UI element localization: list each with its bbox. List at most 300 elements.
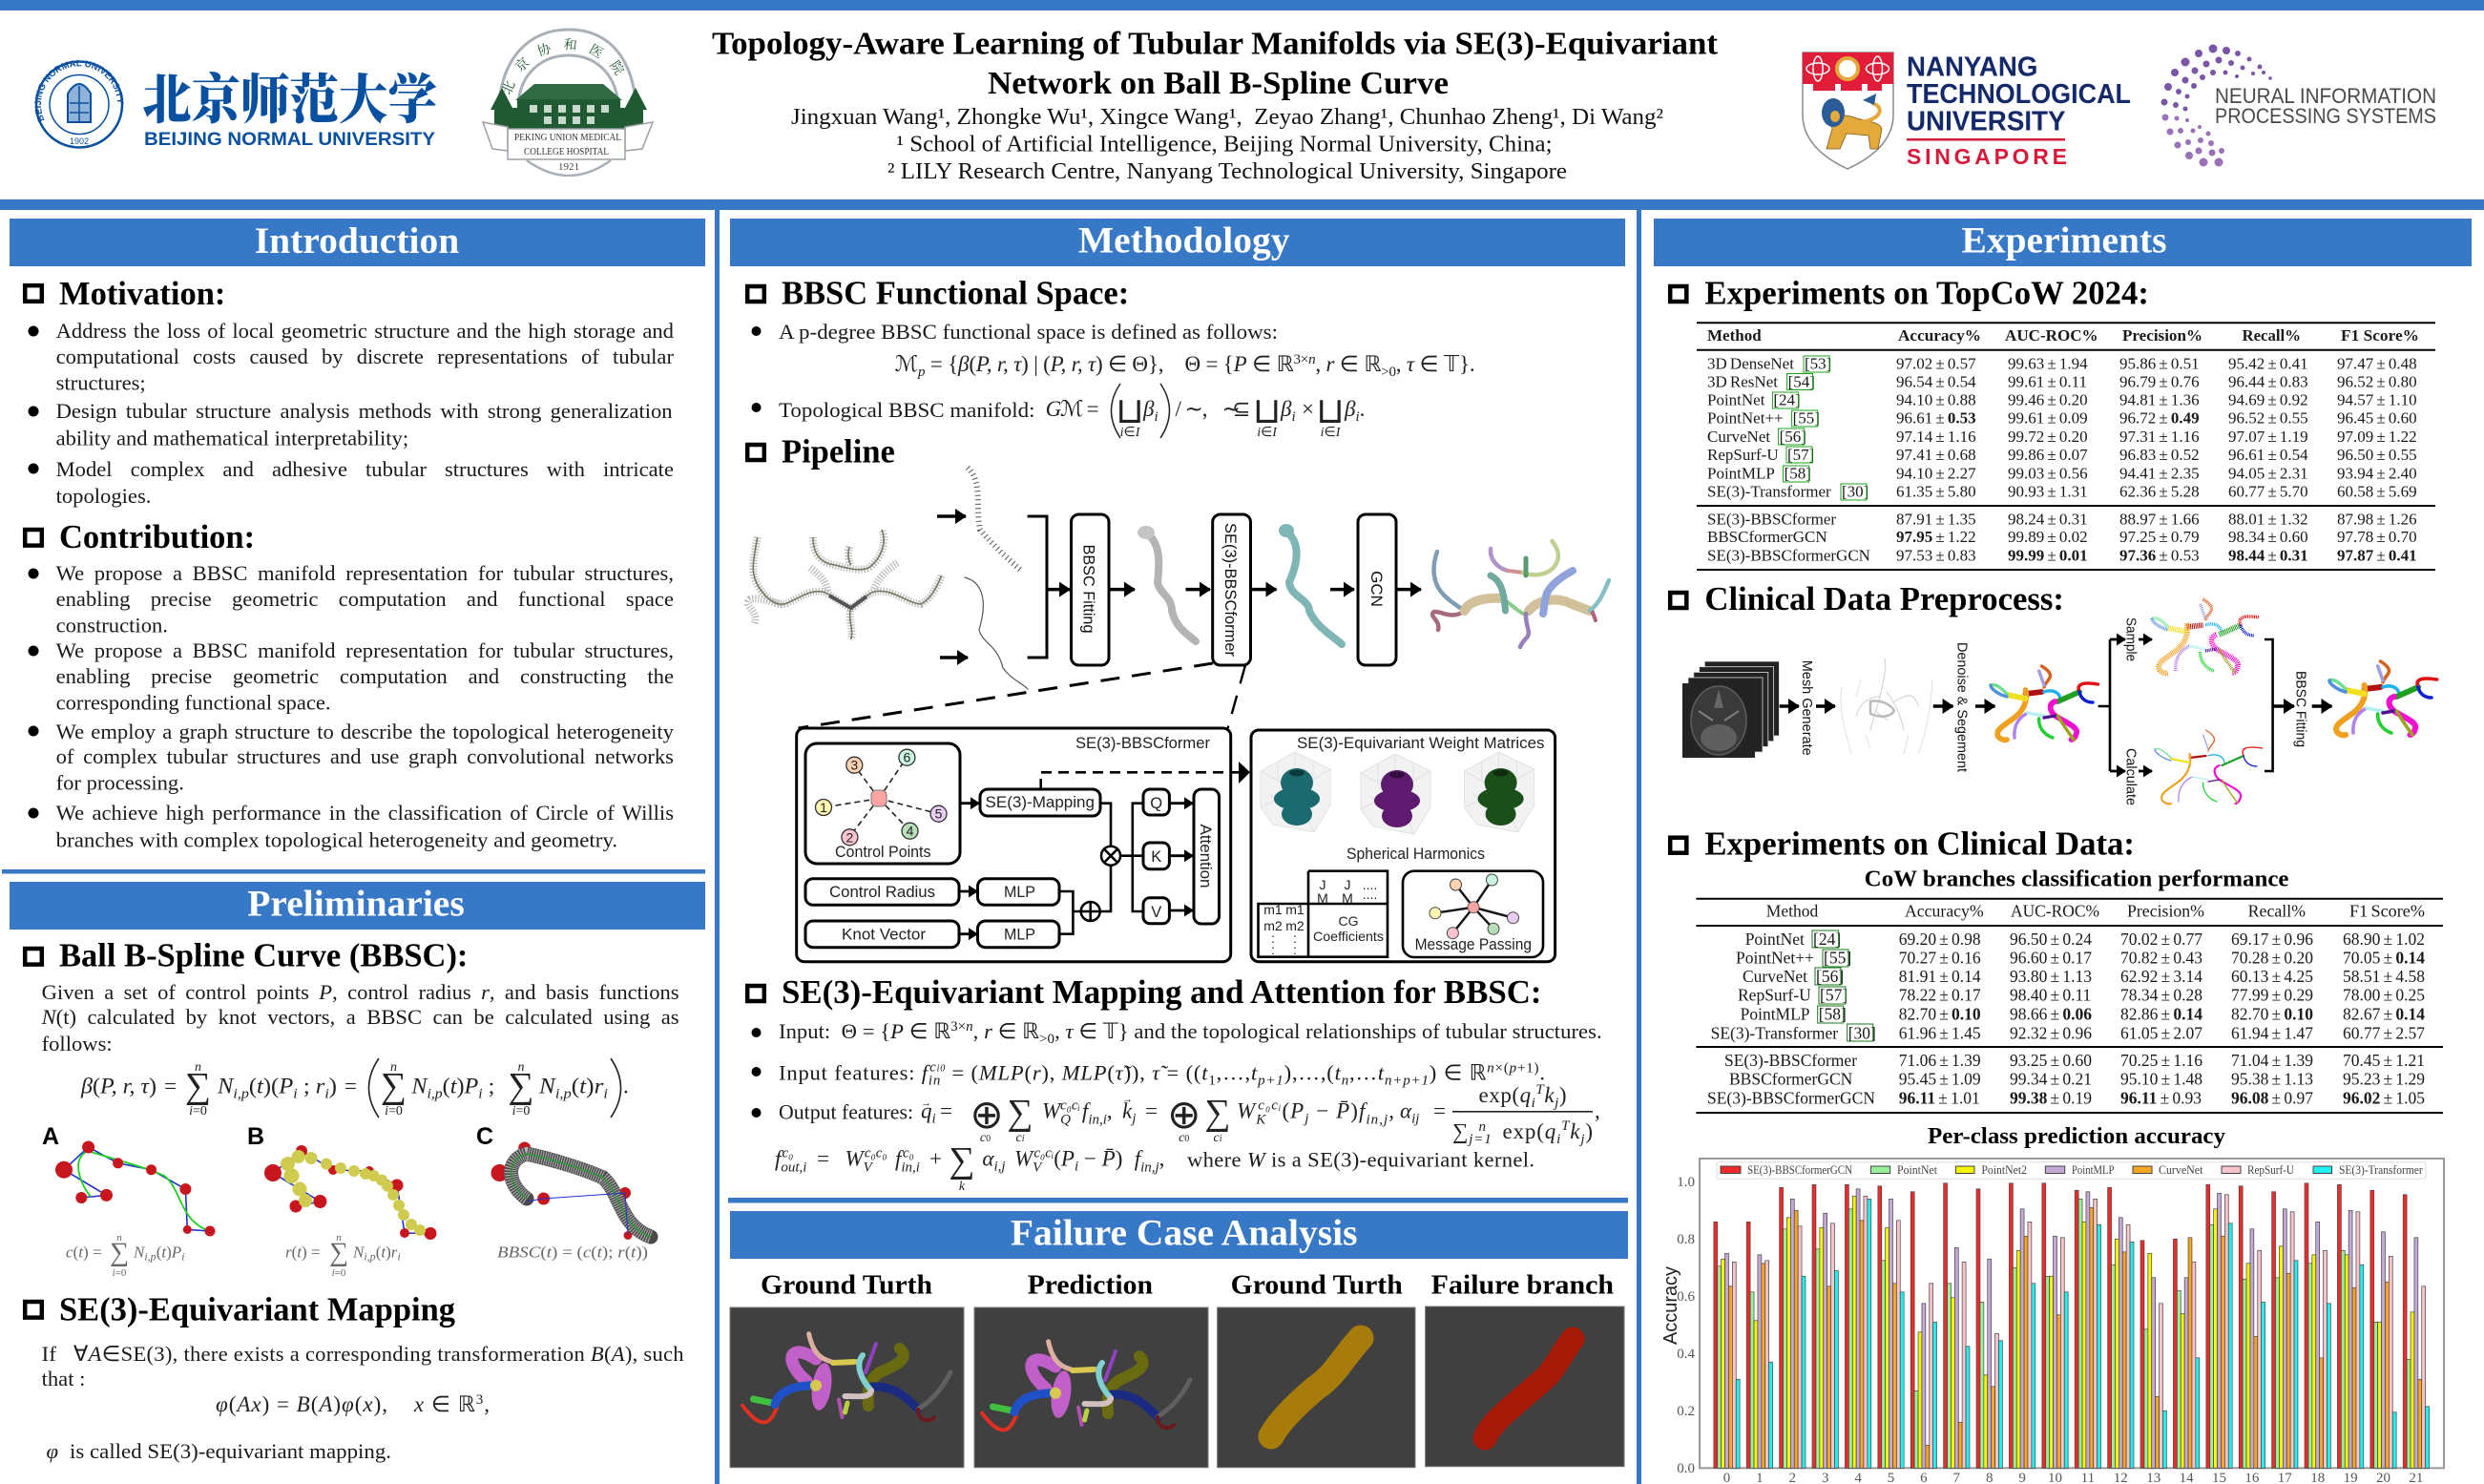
bullet: output features: exp( [1496, 1119, 1544, 1143]
table: TopCoW 2024 results: [57] [1787, 446, 1814, 464]
text: topological BBSC manifold: × [1302, 397, 1314, 421]
bullet: input features: n [1342, 1074, 1348, 1089]
bullet: input: τ ∈ 𝕋} and the topological relationships of tubular structures. [1065, 1019, 1602, 1043]
formula: BBSC: ∑ [185, 1066, 211, 1106]
table: clinical results: 98.66 ± 0.06 [2010, 1004, 2092, 1023]
table: clinical results: 82.70 ± 0.10 [2231, 1004, 2313, 1023]
text: functional space definition: >0 [1381, 365, 1396, 380]
Q K V boxes: V [1151, 904, 1161, 921]
table: clinical results: 96.50 ± 0.24 [2010, 930, 2092, 949]
text: motivation bullets: structures; [56, 370, 146, 395]
figure B: radius balls: B [247, 1123, 264, 1150]
panel: preliminaries [10, 882, 705, 1463]
table: clinical results: 70.05 ± 0.14 [2343, 949, 2425, 968]
formula: output feature update: ∑ [949, 1140, 975, 1181]
table: clinical results: 68.90 ± 1.02 [2343, 930, 2425, 949]
legend: RepSurf-U [2247, 1162, 2295, 1177]
formula: BBSC: ; [483, 1075, 494, 1097]
table: TopCoW 2024 results: SE(3)-Transformer [1707, 483, 1831, 501]
table: clinical results: 95.38 ± 1.13 [2231, 1070, 2313, 1089]
column divider right [1637, 210, 1641, 1484]
table: TopCoW 2024 results: 96.50 ± 0.55 [2337, 446, 2417, 464]
legend: PointMLP [2072, 1162, 2115, 1177]
knot vector row: MLP [1004, 926, 1035, 943]
table: TopCoW 2024 results: 3D ResNet [1707, 372, 1778, 390]
table: clinical results: 96.11 ± 1.01 [1899, 1088, 1980, 1107]
table: clinical results: 78.00 ± 0.25 [2343, 986, 2425, 1005]
formula: BBSC: = [344, 1075, 357, 1097]
CG coefficients table: CG [1338, 913, 1359, 929]
bullet: output features: in,j [1366, 1113, 1388, 1128]
table: clinical results: 61.94 ± 1.47 [2231, 1023, 2313, 1042]
table: clinical results: PointNet++ [1736, 949, 1814, 968]
header: Failure Case Analysis: Failure Case Analysis [1011, 1212, 1357, 1254]
text: equivariance definition: 3 [476, 1392, 483, 1408]
x axis labels [1723, 1471, 2423, 1484]
formula: output feature update: c₀ [782, 1146, 793, 1161]
subheading: Motivation: Motivation: [59, 276, 225, 312]
section divider [2, 869, 705, 874]
logo: Peking Union Medical College Hospital: 北京协和医院 [502, 38, 624, 94]
text: BBSC definition: N(t) calculated by knot vectors, a BBSC can be calculated using as [42, 1005, 679, 1029]
formula: BBSC: t)(P [257, 1075, 292, 1097]
formula: BBSC: t)P [450, 1075, 478, 1097]
CG coefficients table: M [1342, 890, 1353, 906]
text: BBSC definition: Given a set of control points P, control radius r, and basis functions [42, 980, 679, 1004]
table: clinical results: 61.96 ± 1.45 [1899, 1023, 1981, 1042]
table: clinical results: 61.05 ± 2.07 [2120, 1023, 2202, 1042]
header: Experiments [1654, 219, 2472, 266]
arrows [1780, 639, 2332, 771]
table: clinical results: PointMLP [1741, 1004, 1810, 1023]
subheading: Contribution: Contribution: [59, 519, 255, 555]
CG coefficients table: m1 [1285, 902, 1305, 917]
formula: output feature update: c₀ [903, 1146, 914, 1161]
formula: BBSC: n [195, 1060, 201, 1075]
table: clinical results: 77.99 ± 0.29 [2231, 986, 2313, 1005]
legend: CurveNet [2159, 1162, 2203, 1177]
bullet: output features: Output features: [779, 1100, 913, 1124]
formula: output feature update: − [1078, 1147, 1102, 1171]
text: motivation bullets: Address the loss of local geometric structure and the high storage and [56, 319, 674, 343]
logo: Beijing Normal University: 1902 [70, 136, 89, 146]
table: TopCoW 2024 results: 95.42 ± 0.41 [2228, 355, 2308, 373]
bullet: input features: n×(p+1) [1487, 1061, 1539, 1076]
table: TopCoW 2024 results: PointNet [1707, 391, 1765, 409]
table: TopCoW 2024 results: 96.83 ± 0.52 [2119, 446, 2200, 464]
table: TopCoW 2024 results: BBSCformerGCN [1707, 528, 1827, 546]
table: TopCoW 2024 results: [30] [1842, 483, 1868, 501]
table: TopCoW 2024 results: 97.53 ± 0.83 [1896, 547, 1976, 565]
bullet: output features: j=1 [1467, 1132, 1492, 1147]
header: Methodology: Methodology [1078, 219, 1290, 261]
bullet: output features: n [1479, 1119, 1486, 1135]
figure B: radius balls: n [336, 1232, 342, 1244]
dashed arrow to weight matrices [1041, 762, 1250, 789]
table: clinical results: 82.86 ± 0.14 [2120, 1004, 2202, 1023]
text: functional space definition: , [1396, 352, 1407, 376]
formula: output feature update: f [1135, 1147, 1144, 1171]
text: BBSC definition [42, 979, 679, 1056]
subheading: Experiments on Clinical Data: Experiments on Clinical Data: [1704, 826, 2135, 863]
figure A: control polygon and centre curve [42, 1123, 216, 1279]
bullet: input: r ∈ ℝ [984, 1019, 1039, 1043]
table: TopCoW 2024 results: SE(3)-BBSCformer [1707, 510, 1836, 528]
title: Topology-Aware Learning of Tubular Manifolds via SE(3)-Equivariant [712, 27, 1719, 62]
text: functional space definition: β(P, r, τ) | (P, r, τ) ∈ Θ}, Θ = {P ∈ ℝ [958, 352, 1294, 376]
control radius row: MLP [1004, 884, 1035, 901]
table: TopCoW 2024 results: 94.57 ± 1.10 [2337, 391, 2417, 409]
bullet: output features: ⊕ [1167, 1094, 1200, 1138]
table: clinical results: 98.40 ± 0.11 [2010, 986, 2091, 1005]
formula: output feature update: W [1014, 1147, 1034, 1171]
subheading: SE(3)-Equivariant Mapping and Attention: SE(3)-Equivariant Mapping and Attention for BBSC: [782, 974, 1542, 1011]
text: topological BBSC manifold: i [1154, 409, 1159, 425]
header: Methodology [730, 219, 1625, 266]
formula: output feature update: c₀c₀ [865, 1146, 887, 1161]
table: TopCoW 2024 results: 99.61 ± 0.09 [2008, 409, 2088, 428]
authors and affiliations: ² LILY Research Centre, Nanyang Technological University, Singapore [887, 159, 1567, 184]
CG coefficients table: m2 [1263, 918, 1283, 933]
figure A: control polygon and centre curve: i,p [144, 1250, 157, 1264]
table: TopCoW 2024 results: 96.52 ± 0.80 [2337, 372, 2417, 390]
table: clinical results: 92.32 ± 0.96 [2010, 1023, 2092, 1042]
y axis: 0.0 [1677, 1461, 1695, 1476]
formula: output feature update: α [982, 1147, 994, 1171]
coloured vessel result [1432, 541, 1609, 647]
subheading: SE(3)-Equivariant Mapping: SE(3)-Equivariant Mapping [59, 1292, 455, 1328]
attention box [1194, 789, 1220, 924]
text: topological BBSC manifold: Gℳ = [1046, 397, 1099, 421]
rotated step labels: Mesh Generate [1799, 660, 1815, 756]
bullet: output features: i [931, 1112, 936, 1127]
figure A: control polygon and centre curve: ∑ [110, 1238, 129, 1267]
image: failure branch: Failure branch [1431, 1269, 1614, 1300]
bullet: output features: T [1535, 1082, 1545, 1097]
text: contribution bullets: We propose a BBSC manifold representation for tubular structures, [56, 638, 674, 662]
table: clinical results: [55] [1824, 949, 1851, 968]
table: TopCoW 2024 results: 88.01 ± 1.32 [2228, 510, 2308, 528]
bullet: output features: → [1122, 1094, 1133, 1105]
table: TopCoW 2024 results: 94.05 ± 2.31 [2228, 465, 2308, 483]
table: TopCoW 2024 results: 99.63 ± 1.94 [2008, 355, 2088, 373]
figure A: control polygon and centre curve: A [42, 1123, 59, 1150]
image: predicted vessels: Prediction [1028, 1269, 1153, 1300]
CG coefficients table [1258, 871, 1388, 957]
table: TopCoW 2024 results: 97.95 ± 1.22 [1896, 528, 1976, 546]
logo: Peking Union Medical College Hospital: 1921 [558, 161, 579, 173]
title [712, 27, 1719, 101]
legend: SE(3)-Transformer [2339, 1162, 2423, 1177]
formula: output feature update: + [929, 1147, 942, 1171]
control points graph: 6 [904, 750, 911, 765]
subheading: Pipeline: Pipeline [782, 433, 895, 470]
formula: output feature update: i [1075, 1160, 1078, 1175]
figure B: radius balls [247, 1123, 437, 1279]
bullet: output features: c₀cᵢ [1060, 1098, 1080, 1114]
text: topological BBSC manifold: / ∼, [1176, 397, 1208, 421]
table: clinical results: 70.82 ± 0.43 [2120, 949, 2202, 968]
figure B: radius balls: t)r [381, 1244, 397, 1262]
text: motivation bullets: ability and mathematical interpretability; [56, 426, 408, 450]
y axis [1660, 1175, 1695, 1476]
formula: output feature update: P [1060, 1147, 1075, 1171]
header [34, 27, 2436, 184]
text: topological BBSC manifold: ⊔ [1116, 391, 1144, 431]
rotated step labels: Sample [2122, 617, 2140, 661]
y axis: 0.8 [1677, 1232, 1695, 1247]
box: BBSC Fitting: BBSC Fitting [1080, 544, 1097, 634]
image: failure branch [1426, 1269, 1624, 1467]
bullet: input: , [1054, 1019, 1065, 1043]
SE(3)-Mapping box: SE(3)-Mapping [985, 794, 1095, 811]
table: TopCoW 2024 results: 96.61 ± 0.53 [1896, 409, 1976, 428]
formula: output feature update: where W is a SE(3)-equivariant kernel. [1187, 1148, 1534, 1172]
bullet: output features: ∑ [1452, 1119, 1468, 1143]
flow arrows [959, 804, 1193, 934]
formula: BBSC: . [623, 1075, 629, 1097]
formula: BBSC: i=0 [512, 1104, 530, 1118]
y axis: 0.4 [1677, 1347, 1695, 1362]
box: GCN: GCN [1367, 571, 1386, 607]
table: clinical results: AUC-ROC% [2011, 902, 2099, 921]
segmented vessels [1991, 666, 2098, 740]
text: equivariance definition: φ [46, 1439, 58, 1463]
table: clinical results: SE(3)-BBSCformer [1724, 1051, 1857, 1070]
control points graph [805, 743, 960, 864]
table title: CoW branches: CoW branches classification performance [1865, 867, 2289, 891]
figure A: control polygon and centre curve: t)P [161, 1244, 181, 1262]
text: motivation bullets: computational costs caused by discrete representations of tubular [56, 345, 674, 368]
bullet: input features [752, 1060, 1545, 1089]
multiply and add nodes [1081, 847, 1120, 921]
text: contribution bullets: for processing. [56, 770, 184, 794]
formula: BBSC: ) [329, 1075, 337, 1097]
text: contribution bullets [29, 560, 674, 851]
table: clinical results: 71.06 ± 1.39 [1899, 1051, 1981, 1070]
control radius row: Control Radius [829, 884, 935, 901]
bullet: input features: ) ∈ ℝ [1430, 1061, 1487, 1085]
panel: SE(3)-equivariant weight matrices [1251, 730, 1555, 962]
panel: SE(3)-BBSCformer architecture: SE(3)-BBSCformer [1075, 735, 1211, 752]
bullet: input features: n+p+1 [1385, 1074, 1429, 1089]
formula: BBSC: N [538, 1075, 557, 1097]
legend: PointNet [1897, 1162, 1937, 1177]
panel: SE(3)-equivariant weight matrices: SE(3)-Equivariant Weight Matrices [1297, 735, 1544, 752]
table: clinical results: 71.04 ± 1.39 [2231, 1051, 2313, 1070]
table: clinical results: 60.13 ± 4.25 [2231, 967, 2313, 986]
rotated step labels: BBSC Fitting [2292, 671, 2309, 747]
CG coefficients table: : [1293, 942, 1297, 957]
table: clinical results: 82.67 ± 0.14 [2343, 1004, 2425, 1023]
table: clinical results: 99.38 ± 0.19 [2010, 1088, 2092, 1107]
text: topological BBSC manifold: . [1360, 397, 1365, 421]
subheading: Ball B-Spline Curve: Ball B-Spline Curve (BBSC): [59, 937, 468, 973]
text: motivation bullets: Model complex and adhesive tubular structures with intricate [56, 457, 674, 481]
table: TopCoW 2024 results: 97.78 ± 0.70 [2337, 528, 2417, 546]
table: TopCoW 2024 results: 96.52 ± 0.55 [2228, 409, 2308, 428]
y axis: 0.6 [1677, 1289, 1695, 1305]
table: clinical results [1696, 899, 2443, 1113]
bullet: output features [752, 1082, 1600, 1147]
bullet: output features: W [1042, 1099, 1062, 1123]
text: topological BBSC manifold: i∈I [1321, 426, 1342, 440]
bullet: input: >0 [1039, 1032, 1054, 1047]
image: ground truth branch: Ground Turth [1231, 1269, 1403, 1300]
box: SE(3)-BBSCformer: SE(3)-BBSCformer [1221, 523, 1240, 657]
bullet: output features: = [940, 1099, 952, 1123]
bullet: input features: = ( [946, 1061, 978, 1085]
table: TopCoW 2024 results: 96.72 ± 0.49 [2119, 409, 2200, 428]
Q K V boxes [1143, 789, 1169, 924]
rotated step labels: Denoise & Segement [1954, 642, 1971, 773]
table: TopCoW 2024 results: 94.10 ± 2.27 [1896, 465, 1976, 483]
text: functional space definition: = { [925, 352, 958, 376]
text: equivariance definition: that : [42, 1367, 85, 1390]
table: TopCoW 2024 results: 60.77 ± 5.70 [2228, 483, 2308, 501]
formula: BBSC: ∑ [508, 1066, 534, 1106]
formula: output feature update [775, 1140, 1534, 1194]
formula: output feature update: V [1033, 1160, 1043, 1176]
table: TopCoW 2024 results: 99.46 ± 0.20 [2008, 391, 2088, 409]
text: contribution bullets: We achieve high performance in the classification of Circle of Willis [56, 801, 674, 825]
table: TopCoW 2024 results: 97.02 ± 0.57 [1896, 355, 1976, 373]
control points graph: 1 [820, 800, 827, 815]
authors and affiliations: Jingxuan Wang¹, Zhongke Wu¹, Xingce Wang¹, Zeyao Zhang¹, Chunhao Zheng¹, Di Wang² [791, 105, 1663, 130]
bullet: output features: , [1107, 1099, 1113, 1123]
formula: BBSC: ( [249, 1075, 257, 1097]
CG coefficients table: m1 [1263, 902, 1283, 917]
bullet: output features: Q [1060, 1113, 1071, 1128]
text: topological BBSC manifold: i [1355, 409, 1360, 425]
bullet: output features: i [1532, 1096, 1535, 1111]
text: topological BBSC manifold: ⊔ [1316, 391, 1345, 431]
text: topological BBSC manifold: i∈I [1120, 426, 1141, 440]
formula: BBSC: i,p [428, 1086, 443, 1101]
formula: output feature update: in,j [1140, 1160, 1159, 1176]
formula: BBSC: ; [298, 1075, 316, 1097]
bullet: output features: ) [1585, 1119, 1593, 1143]
header: Introduction: Introduction [255, 219, 459, 261]
table: TopCoW 2024 results: 97.07 ± 1.19 [2228, 428, 2308, 446]
formula: output feature update: k [959, 1180, 966, 1194]
formula: BBSC: N [410, 1075, 428, 1097]
CG coefficients table: .... [1363, 877, 1377, 892]
table: TopCoW 2024 results: 99.99 ± 0.01 [2008, 547, 2088, 565]
header: Preliminaries [10, 882, 705, 930]
y axis: 1.0 [1677, 1175, 1695, 1190]
legend: SE(3)-BBSCformerGCN [1747, 1162, 1853, 1177]
table: TopCoW 2024 results: F1 Score% [2341, 326, 2419, 345]
table: clinical results: [58] [1819, 1004, 1847, 1023]
figure B: radius balls: i,p [364, 1250, 376, 1264]
text: equivariance definition [42, 1342, 684, 1463]
table: TopCoW 2024 results: 88.97 ± 1.66 [2119, 510, 2200, 528]
text: motivation bullets [29, 318, 674, 508]
text: motivation bullets: topologies. [56, 484, 151, 508]
subheading: Experiments on TopCoW 2024: Experiments on TopCoW 2024: [1704, 275, 2149, 311]
bullet: output features: q [921, 1099, 931, 1123]
table: TopCoW 2024 results: PointMLP [1707, 465, 1775, 483]
text: topological BBSC manifold: Topological BBSC manifold: [779, 398, 1034, 422]
logo: NeurIPS: NEURAL INFORMATION [2215, 84, 2436, 108]
Q K V boxes: Q [1150, 795, 1162, 812]
formula: BBSC: ( [443, 1075, 450, 1097]
table: TopCoW 2024 results: 60.58 ± 5.69 [2337, 483, 2417, 501]
legend [1717, 1162, 2426, 1179]
table: clinical results: 96.11 ± 0.93 [2120, 1088, 2202, 1107]
panel: SE(3)-BBSCformer architecture [797, 728, 1250, 962]
text: BBSC definition: follows: [42, 1032, 113, 1056]
bullet: output features: q [1545, 1119, 1555, 1143]
figure A: control polygon and centre curve: N [133, 1244, 146, 1262]
formula: BBSC: n [517, 1060, 525, 1075]
figure B: radius balls: ∑ [329, 1238, 348, 1267]
table: TopCoW 2024 results: 97.25 ± 0.79 [2119, 528, 2200, 546]
panel: failure case analysis [730, 1211, 1628, 1468]
table: clinical results: 96.02 ± 1.05 [2343, 1088, 2425, 1107]
table: clinical results: 69.20 ± 0.98 [1899, 930, 1981, 949]
logo: Peking Union Medical College Hospital: PEKING UNION MEDICAL [514, 133, 621, 143]
bullet: output features: = [1145, 1099, 1158, 1123]
bullet: output features: ⊕ [970, 1094, 1004, 1138]
table: TopCoW 2024 results: 97.87 ± 0.41 [2337, 547, 2417, 565]
y axis: 0.2 [1677, 1404, 1695, 1419]
table: TopCoW 2024 results: 61.35 ± 5.80 [1896, 483, 1976, 501]
text: contribution bullets: branches with complex topological heterogeneity and geometry. [56, 828, 617, 851]
CG coefficients table: J [1344, 877, 1351, 892]
table: TopCoW 2024 results: 95.86 ± 0.51 [2119, 355, 2200, 373]
table: clinical results: [57] [1820, 986, 1847, 1005]
text: topological BBSC manifold: ∼⊆ [1221, 397, 1250, 421]
bullet: input features: ,…, [1217, 1061, 1250, 1085]
table: TopCoW 2024 results: Accuracy% [1898, 326, 1981, 345]
box: SE(3)-BBSCformer [1213, 514, 1250, 665]
table: TopCoW 2024 results: [24] [1773, 391, 1801, 409]
bullet: output features: = [1433, 1099, 1446, 1123]
bullet: input features: t [1378, 1061, 1385, 1085]
text: contribution bullets: We propose a BBSC manifold representation for tubular structures, [56, 561, 674, 585]
logo: Peking Union Medical College Hospital: COLLEGE HOSPITAL [524, 147, 609, 157]
panel: experiments [1654, 219, 2472, 1484]
formula: BBSC: ( [572, 1075, 579, 1097]
chart title: per-class accuracy: Per-class prediction accuracy [1928, 1124, 2225, 1149]
CG coefficients table: .... [1363, 887, 1377, 902]
figure C: full tube surface [476, 1123, 651, 1262]
table: TopCoW 2024 results: 98.44 ± 0.31 [2228, 547, 2308, 565]
table: TopCoW 2024 results [1697, 323, 2435, 570]
table: TopCoW 2024 results: 94.81 ± 1.36 [2119, 391, 2200, 409]
bar chart: per-class prediction accuracy [1660, 1159, 2444, 1484]
bullet: output features: j [1303, 1112, 1308, 1127]
bullet: output features: exp(q [1479, 1083, 1531, 1107]
table: clinical results: Precision% [2127, 902, 2204, 921]
text: topological BBSC manifold: i [1291, 409, 1296, 425]
formula: BBSC: i [324, 1086, 329, 1101]
MRI slice stack [1682, 661, 1779, 758]
table: clinical results: 95.45 ± 1.09 [1899, 1070, 1981, 1089]
table: clinical results: 69.17 ± 0.96 [2231, 930, 2313, 949]
text: functional space definition: , [1315, 352, 1326, 376]
formula: BBSC [80, 1058, 629, 1118]
formula: output feature update: P̄) [1102, 1147, 1122, 1171]
bullet: output features: → [921, 1097, 931, 1109]
CG coefficients table: : [1271, 930, 1275, 946]
table: TopCoW 2024 results: 99.61 ± 0.11 [2008, 372, 2087, 390]
table: TopCoW 2024 results: 97.31 ± 1.16 [2119, 428, 2200, 446]
authors and affiliations: ¹ School of Artificial Intelligence, Beijing Normal University, China; [897, 132, 1552, 157]
pipeline diagram [748, 468, 1609, 962]
